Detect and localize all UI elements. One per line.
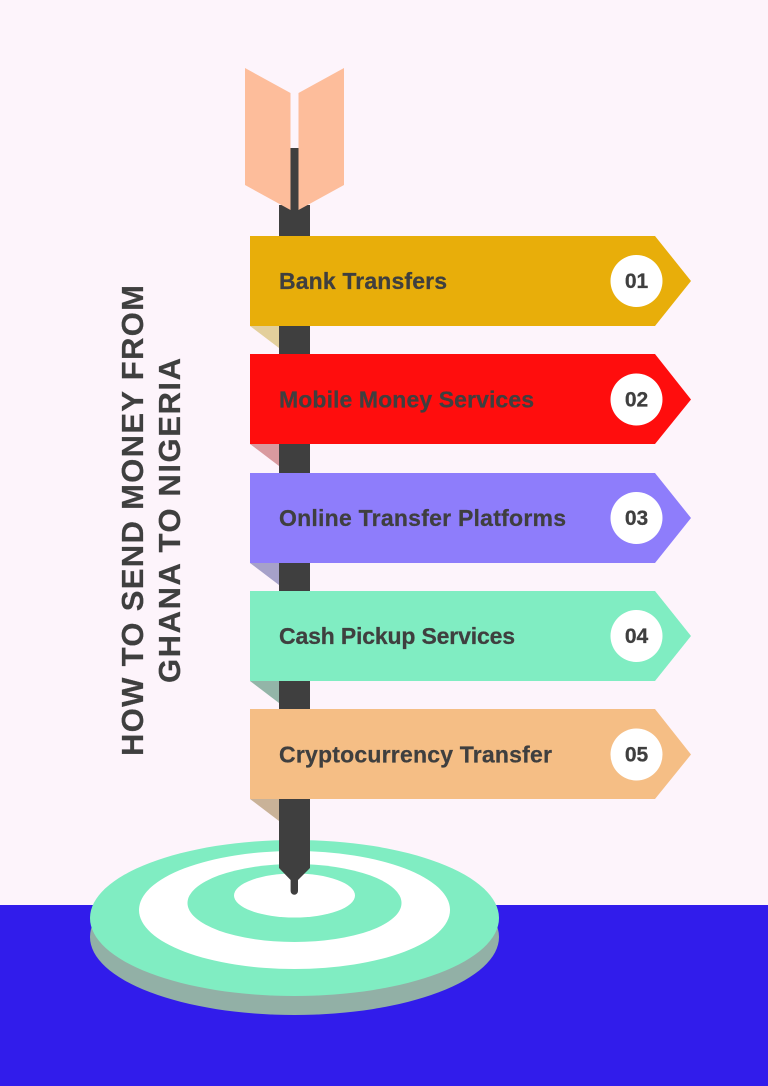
sign 2: mobile money services: 02 (625, 388, 648, 412)
sign 5: cryptocurrency transfer: 05 (625, 744, 648, 766)
sign 1: bank transfers: Bank Transfers (279, 268, 447, 294)
sign 3: online transfer platforms: 03 (625, 507, 648, 530)
sign 1: bank transfers (250, 236, 691, 348)
sign 3: online transfer platforms (250, 473, 691, 585)
title: HOW TO SEND MONEY FROM (115, 285, 150, 756)
sign 4: cash pickup services (250, 591, 691, 703)
arrow fletching (245, 68, 344, 210)
title (115, 285, 187, 756)
sign 5: cryptocurrency transfer (250, 709, 691, 821)
target board (90, 840, 499, 1015)
sign 5: cryptocurrency transfer: Cryptocurrency Transfer (279, 742, 552, 768)
sign 2: mobile money services: Mobile Money Services (279, 386, 534, 412)
arrow shaft (279, 148, 310, 895)
blue ground band (0, 905, 768, 1086)
sign 1: bank transfers: 01 (625, 270, 648, 293)
sign 3: online transfer platforms: Online Transfer Platforms (279, 505, 566, 531)
sign 4: cash pickup services: 04 (625, 625, 648, 648)
sign 2: mobile money services (250, 354, 691, 466)
title: GHANA TO NIGERIA (152, 358, 187, 683)
sign 4: cash pickup services: Cash Pickup Services (279, 623, 515, 649)
